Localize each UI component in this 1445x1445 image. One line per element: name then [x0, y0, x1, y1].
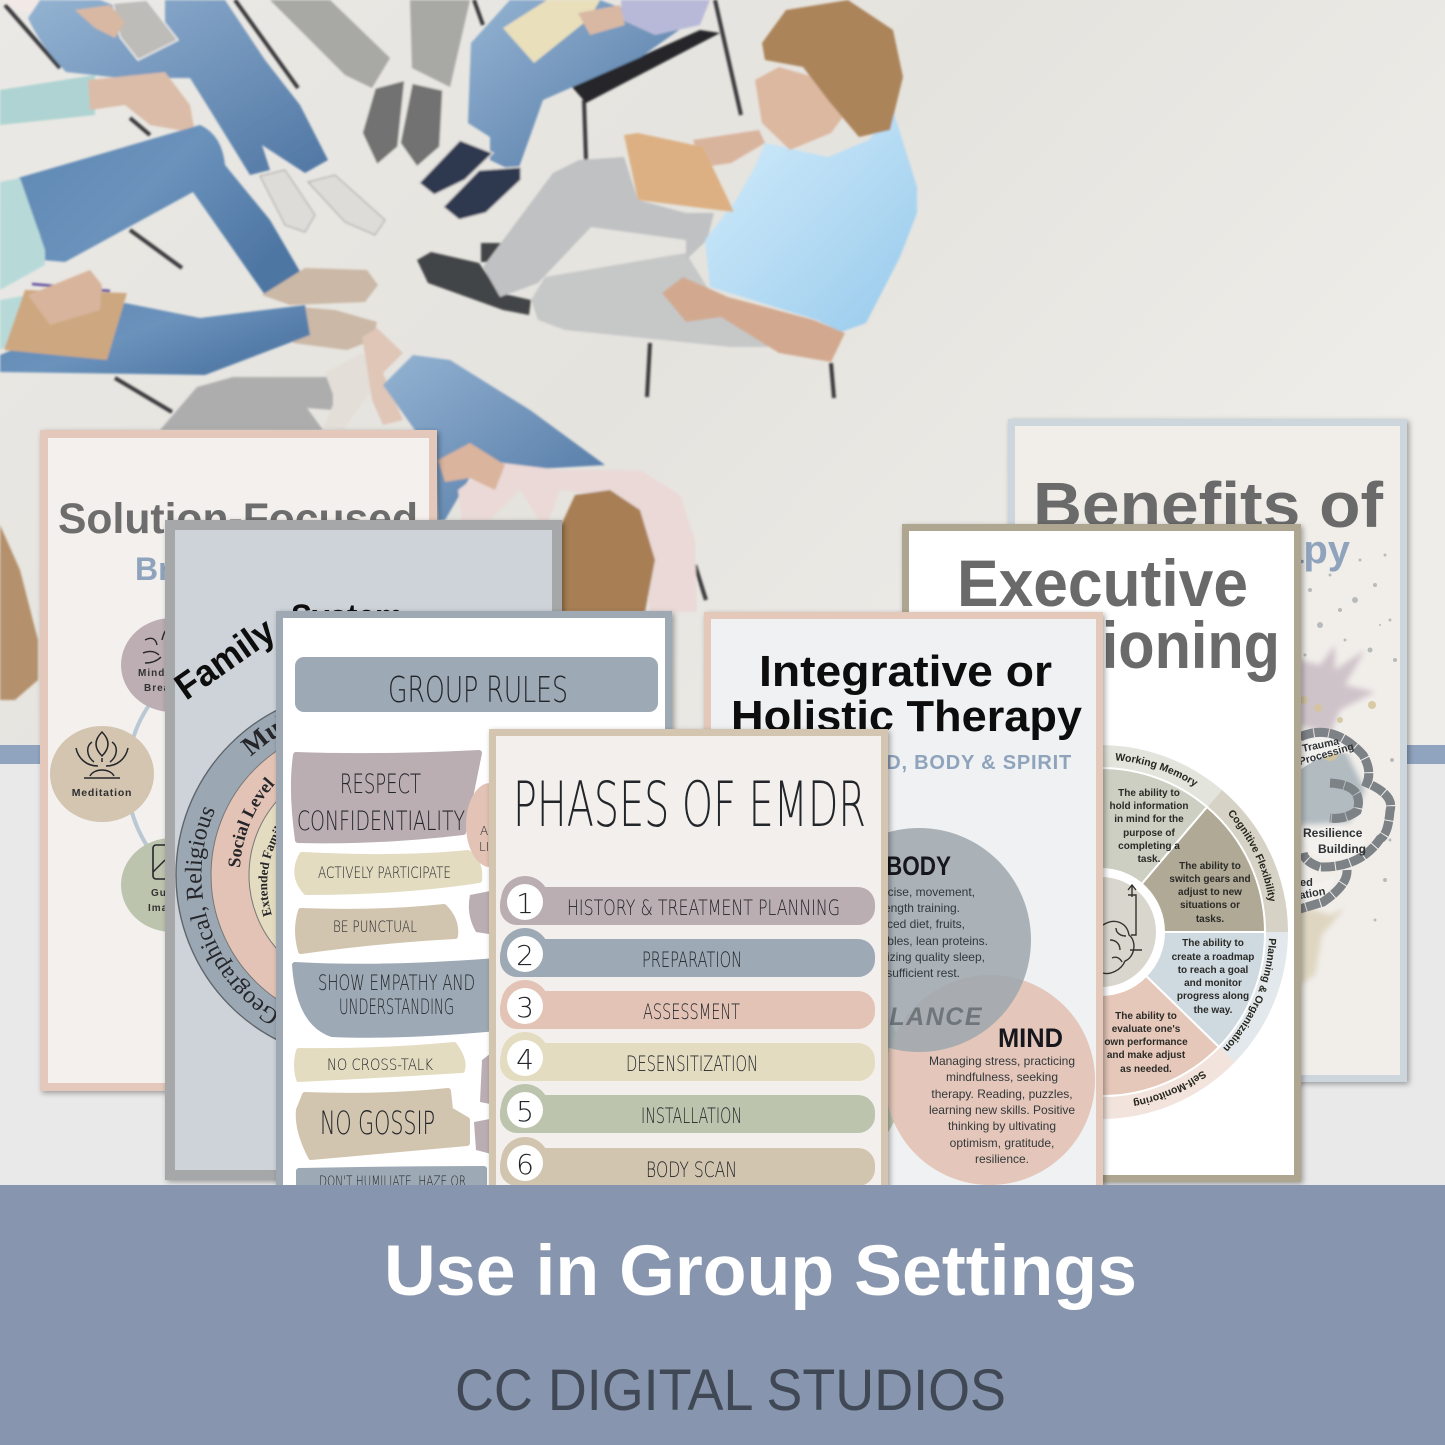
poster subheading: MIND, BODY & SPIRIT	[847, 752, 1072, 774]
node: guided imagery: Guided	[151, 888, 191, 899]
panel: Solution Focused Brief Therapy poster	[44, 434, 433, 1087]
text: self-monitoring definition: The ability to	[1115, 1011, 1177, 1022]
body label: BODY	[886, 851, 951, 881]
man's forearm and fist	[662, 277, 845, 362]
partly hidden rule blobs	[469, 890, 495, 1155]
label: Cognitive Flexibility: Cognitive Flexibility	[1228, 810, 1275, 902]
rule: don't humiliate	[299, 1169, 484, 1210]
benefit: trauma processing: Trauma	[1301, 735, 1340, 755]
top-right person's jeans	[468, 0, 679, 173]
hand on notebook	[75, 5, 125, 38]
fist near knee	[88, 72, 195, 133]
navy sneakers	[419, 140, 521, 220]
text: cognitive flexibility definition	[1169, 861, 1251, 925]
poster heading: Integrative or	[759, 647, 1052, 696]
blue t-shirt	[705, 110, 917, 332]
label: Planning & Organization: Planning & Organization	[1223, 938, 1276, 1051]
text: working memory definition: completing a	[1118, 841, 1180, 852]
rule: no gossip: NO GOSSIP	[320, 1104, 435, 1142]
panel: Family System poster	[164, 518, 567, 1185]
text: planning definition: create a roadmap	[1172, 952, 1254, 963]
man's face	[755, 67, 848, 150]
balance label: BALANCE	[850, 1003, 983, 1031]
mind text	[929, 1054, 1075, 1166]
spirit circle	[695, 970, 905, 1180]
body text: Balanced diet, fruits,	[856, 917, 965, 931]
black chair seat	[572, 30, 720, 103]
rule: respect confidentiality: CONFIDENTIALITY	[297, 806, 465, 837]
pink shoe	[362, 328, 403, 425]
text: self-monitoring definition	[1104, 1011, 1188, 1075]
clasped hands	[438, 443, 505, 490]
man's arm holding notebook	[693, 130, 765, 167]
phase 3 row: 3	[516, 991, 534, 1024]
text: working memory definition	[1110, 788, 1188, 865]
writing hand	[28, 270, 102, 325]
man's grey jeans lower leg	[531, 253, 769, 347]
poster heading: Family: Family	[167, 609, 283, 708]
text: cognitive flexibility definition: situations or	[1180, 900, 1240, 911]
executive functions wheel	[1103, 745, 1288, 1119]
left person's jeans upper leg	[18, 125, 302, 295]
text: planning definition: The ability to	[1182, 938, 1244, 949]
top-left person's jeans	[28, 0, 328, 175]
poster heading line 2: Functioning	[940, 608, 1280, 682]
phase 2 row: 2	[516, 939, 534, 972]
mind text: mindfulness, seeking	[946, 1070, 1058, 1084]
partly hidden rule: active listening: LIS	[479, 840, 497, 854]
body circle	[807, 828, 1031, 1052]
mind text: Managing stress, practicing	[929, 1054, 1075, 1068]
phase 2 row	[500, 928, 875, 977]
pen	[32, 284, 110, 291]
background floor	[0, 0, 1445, 745]
poster heading: PHASES OF EMDR	[513, 768, 866, 841]
woman's sweater	[458, 462, 697, 612]
phase 5 row: INSTALLATION	[641, 1104, 742, 1128]
mind text: therapy. Reading, puzzles,	[931, 1087, 1073, 1101]
phase 4 row: 4	[516, 1043, 534, 1076]
phase 6 row: BODY SCAN	[646, 1158, 737, 1182]
panel: Executive Functioning poster	[900, 522, 1306, 1185]
body text: Prioritizing quality sleep,	[856, 950, 985, 964]
blue horizontal band	[0, 745, 1445, 764]
phase 2 row: PREPARATION	[642, 948, 742, 972]
phase 4 row	[500, 1032, 875, 1081]
label: Working Memory: Working Memory	[1116, 753, 1198, 787]
partly hidden rule: active listening	[466, 783, 514, 867]
rule: no cross-talk	[297, 1045, 463, 1079]
text: self-monitoring definition: and make adjust	[1107, 1050, 1186, 1061]
woman's hair	[545, 490, 655, 612]
hub	[1037, 868, 1165, 996]
rule: actively participate: ACTIVELY PARTICIPATE	[318, 863, 451, 882]
poster heading: Solution-Focused	[58, 495, 418, 543]
panel: Phases of EMDR poster	[492, 732, 884, 1222]
concentric circles diagram: Geographical, Religious	[184, 807, 276, 1024]
concentric circles diagram	[175, 710, 276, 1040]
node: mindful breathing: Breathing	[144, 683, 200, 694]
rule: don't humiliate: DON'T HUMILIATE, HAZE OR	[319, 1174, 466, 1190]
tan book	[4, 290, 127, 360]
benefit: reduced activation: ation	[1298, 886, 1327, 902]
rule: respect confidentiality	[294, 753, 479, 840]
phase 4 row: DESENSITIZATION	[626, 1052, 758, 1076]
rule: show empathy and understanding: UNDERSTANDING	[339, 995, 454, 1019]
brand name: CC DIGITAL STUDIOS	[455, 1358, 1006, 1423]
label: Self-Monitoring: Self-Monitoring	[1134, 1071, 1206, 1106]
body text: strength training.	[871, 901, 960, 915]
text: planning definition: the way.	[1194, 1005, 1233, 1016]
phase 3 row	[500, 980, 875, 1029]
text: working memory definition: purpose of	[1123, 828, 1175, 839]
white label backgrounds	[1300, 737, 1365, 905]
benefit: trauma processing: Processing	[1298, 741, 1355, 768]
white sneakers	[260, 170, 385, 235]
tan sneakers	[262, 268, 378, 350]
text: planning definition	[1172, 938, 1254, 1016]
rule: actively participate	[297, 853, 479, 892]
white shoe	[323, 353, 372, 430]
mind text: thinking by ultivating	[948, 1119, 1056, 1133]
text: planning definition: progress along	[1177, 991, 1249, 1002]
partly hidden rule: active listening: AC	[480, 824, 496, 838]
body text	[851, 885, 988, 980]
top-right hand	[578, 5, 625, 35]
text: cognitive flexibility definition: tasks.	[1196, 914, 1224, 925]
node: guided imagery	[121, 838, 223, 932]
body text: vegetables, lean proteins.	[851, 934, 988, 948]
node: meditation	[50, 726, 154, 822]
body text: sufficient rest.	[886, 966, 960, 980]
text: planning definition: and monitor	[1184, 978, 1242, 989]
poster heading line 1: Executive	[957, 546, 1248, 620]
man's black shoes	[417, 243, 531, 315]
outer ring sectors	[1101, 745, 1288, 1119]
man's curly hair	[762, 0, 903, 137]
grey trousers	[270, 0, 470, 88]
phase 1 row: HISTORY & TREATMENT PLANNING	[567, 896, 840, 920]
mind label: MIND	[998, 1023, 1063, 1053]
man's grey jeans upper leg	[483, 157, 714, 297]
phase 5 row: 5	[516, 1095, 534, 1128]
poster heading: Benefits of	[1033, 469, 1384, 541]
icon: brain with arrows	[1103, 885, 1142, 974]
text: working memory definition: in mind for the	[1114, 814, 1184, 825]
benefit: resilience building: Building	[1318, 842, 1366, 856]
title pill: GROUP RULES	[388, 670, 568, 711]
rule: show empathy and understanding: SHOW EMPATHY AND	[318, 971, 475, 995]
rule: no cross-talk: NO CROSS-TALK	[327, 1055, 433, 1074]
rule: be punctual: BE PUNCTUAL	[333, 917, 417, 936]
paint splatter	[1300, 554, 1397, 985]
mind circle	[885, 975, 1095, 1185]
left person's jeans lower leg	[0, 303, 310, 375]
looped ribbon diagram	[1300, 732, 1391, 909]
footer band	[0, 1185, 1445, 1445]
poster heading	[731, 647, 1083, 741]
text: cognitive flexibility definition: switch gears and	[1169, 874, 1251, 885]
text: self-monitoring definition: as needed.	[1120, 1064, 1172, 1075]
phase 1 row: 1	[516, 887, 534, 920]
top-left person's shirt	[0, 0, 60, 16]
lower grey background	[0, 764, 1445, 1185]
text: cognitive flexibility definition: adjust to new	[1178, 887, 1242, 898]
mint sleeve	[0, 75, 95, 125]
bottom jeans	[383, 355, 605, 520]
connecting ring	[127, 649, 383, 905]
phase 6 row: 6	[516, 1148, 534, 1181]
footer title: Use in Group Settings	[384, 1232, 1137, 1311]
rule: respect confidentiality: RESPECT	[340, 769, 421, 800]
poster subheading: Therapy	[1194, 528, 1351, 572]
node: meditation: Meditation	[72, 787, 132, 799]
tan spiral notebook	[624, 133, 734, 212]
title pill	[295, 657, 658, 712]
text: cognitive flexibility definition: The ability to	[1179, 861, 1241, 872]
text: working memory definition: hold information	[1110, 801, 1188, 812]
concentric circles diagram: Multi	[240, 716, 276, 756]
panel: Benefits of Therapy poster	[1012, 422, 1404, 1078]
node: guided imagery: Imagery	[148, 903, 193, 914]
benefit: reduced activation: ed	[1300, 877, 1313, 889]
node: mindful breathing: Mindful	[138, 668, 181, 679]
phase 6 row	[500, 1137, 875, 1186]
rule: be punctual	[298, 907, 455, 951]
text: working memory definition: The ability to	[1118, 788, 1180, 799]
panel: Group Rules poster	[280, 614, 668, 1210]
phase 1 row	[500, 876, 875, 925]
body text: Exercise, movement,	[863, 885, 975, 899]
poster heading: Holistic Therapy	[731, 692, 1083, 741]
top-right person's shirt	[621, 0, 710, 35]
left edge hair	[0, 525, 38, 700]
mind text: resilience.	[975, 1152, 1029, 1166]
photo: group therapy circle seen from above	[0, 0, 917, 700]
node: mindful breathing	[121, 618, 223, 712]
grey shoes	[362, 80, 443, 167]
rule: no gossip	[299, 1091, 467, 1157]
rule: show empathy and understanding	[295, 961, 497, 1035]
chair legs	[5, 0, 834, 600]
phase 3 row: ASSESSMENT	[643, 1000, 740, 1024]
mind text: learning new skills. Positive	[929, 1103, 1075, 1117]
poster heading: System: System	[291, 598, 403, 636]
panel: Integrative or Holistic Therapy poster	[695, 616, 1100, 1216]
mind text: optimism, gratitude,	[950, 1136, 1054, 1150]
text: self-monitoring definition: own performance	[1104, 1037, 1188, 1048]
benefit: resilience building: Resilience	[1303, 826, 1363, 840]
benefit: reduced activation	[1298, 877, 1327, 902]
poster subheading: Brief Therapy	[135, 551, 341, 587]
bottom grey trousers	[160, 377, 333, 430]
left person's mint shirt	[0, 178, 45, 350]
phase 5 row	[500, 1084, 875, 1133]
benefit: resilience building	[1303, 826, 1366, 856]
text: planning definition: to reach a goal	[1178, 965, 1249, 976]
text: working memory definition: task.	[1138, 854, 1161, 865]
cream notebook	[503, 0, 600, 63]
text: self-monitoring definition: evaluate one's	[1112, 1024, 1181, 1035]
grey notebook	[113, 0, 178, 60]
concentric circles diagram: Social Level	[228, 776, 275, 867]
inner wedges	[1101, 768, 1265, 1096]
concentric circles diagram: Extended Family	[258, 826, 276, 918]
